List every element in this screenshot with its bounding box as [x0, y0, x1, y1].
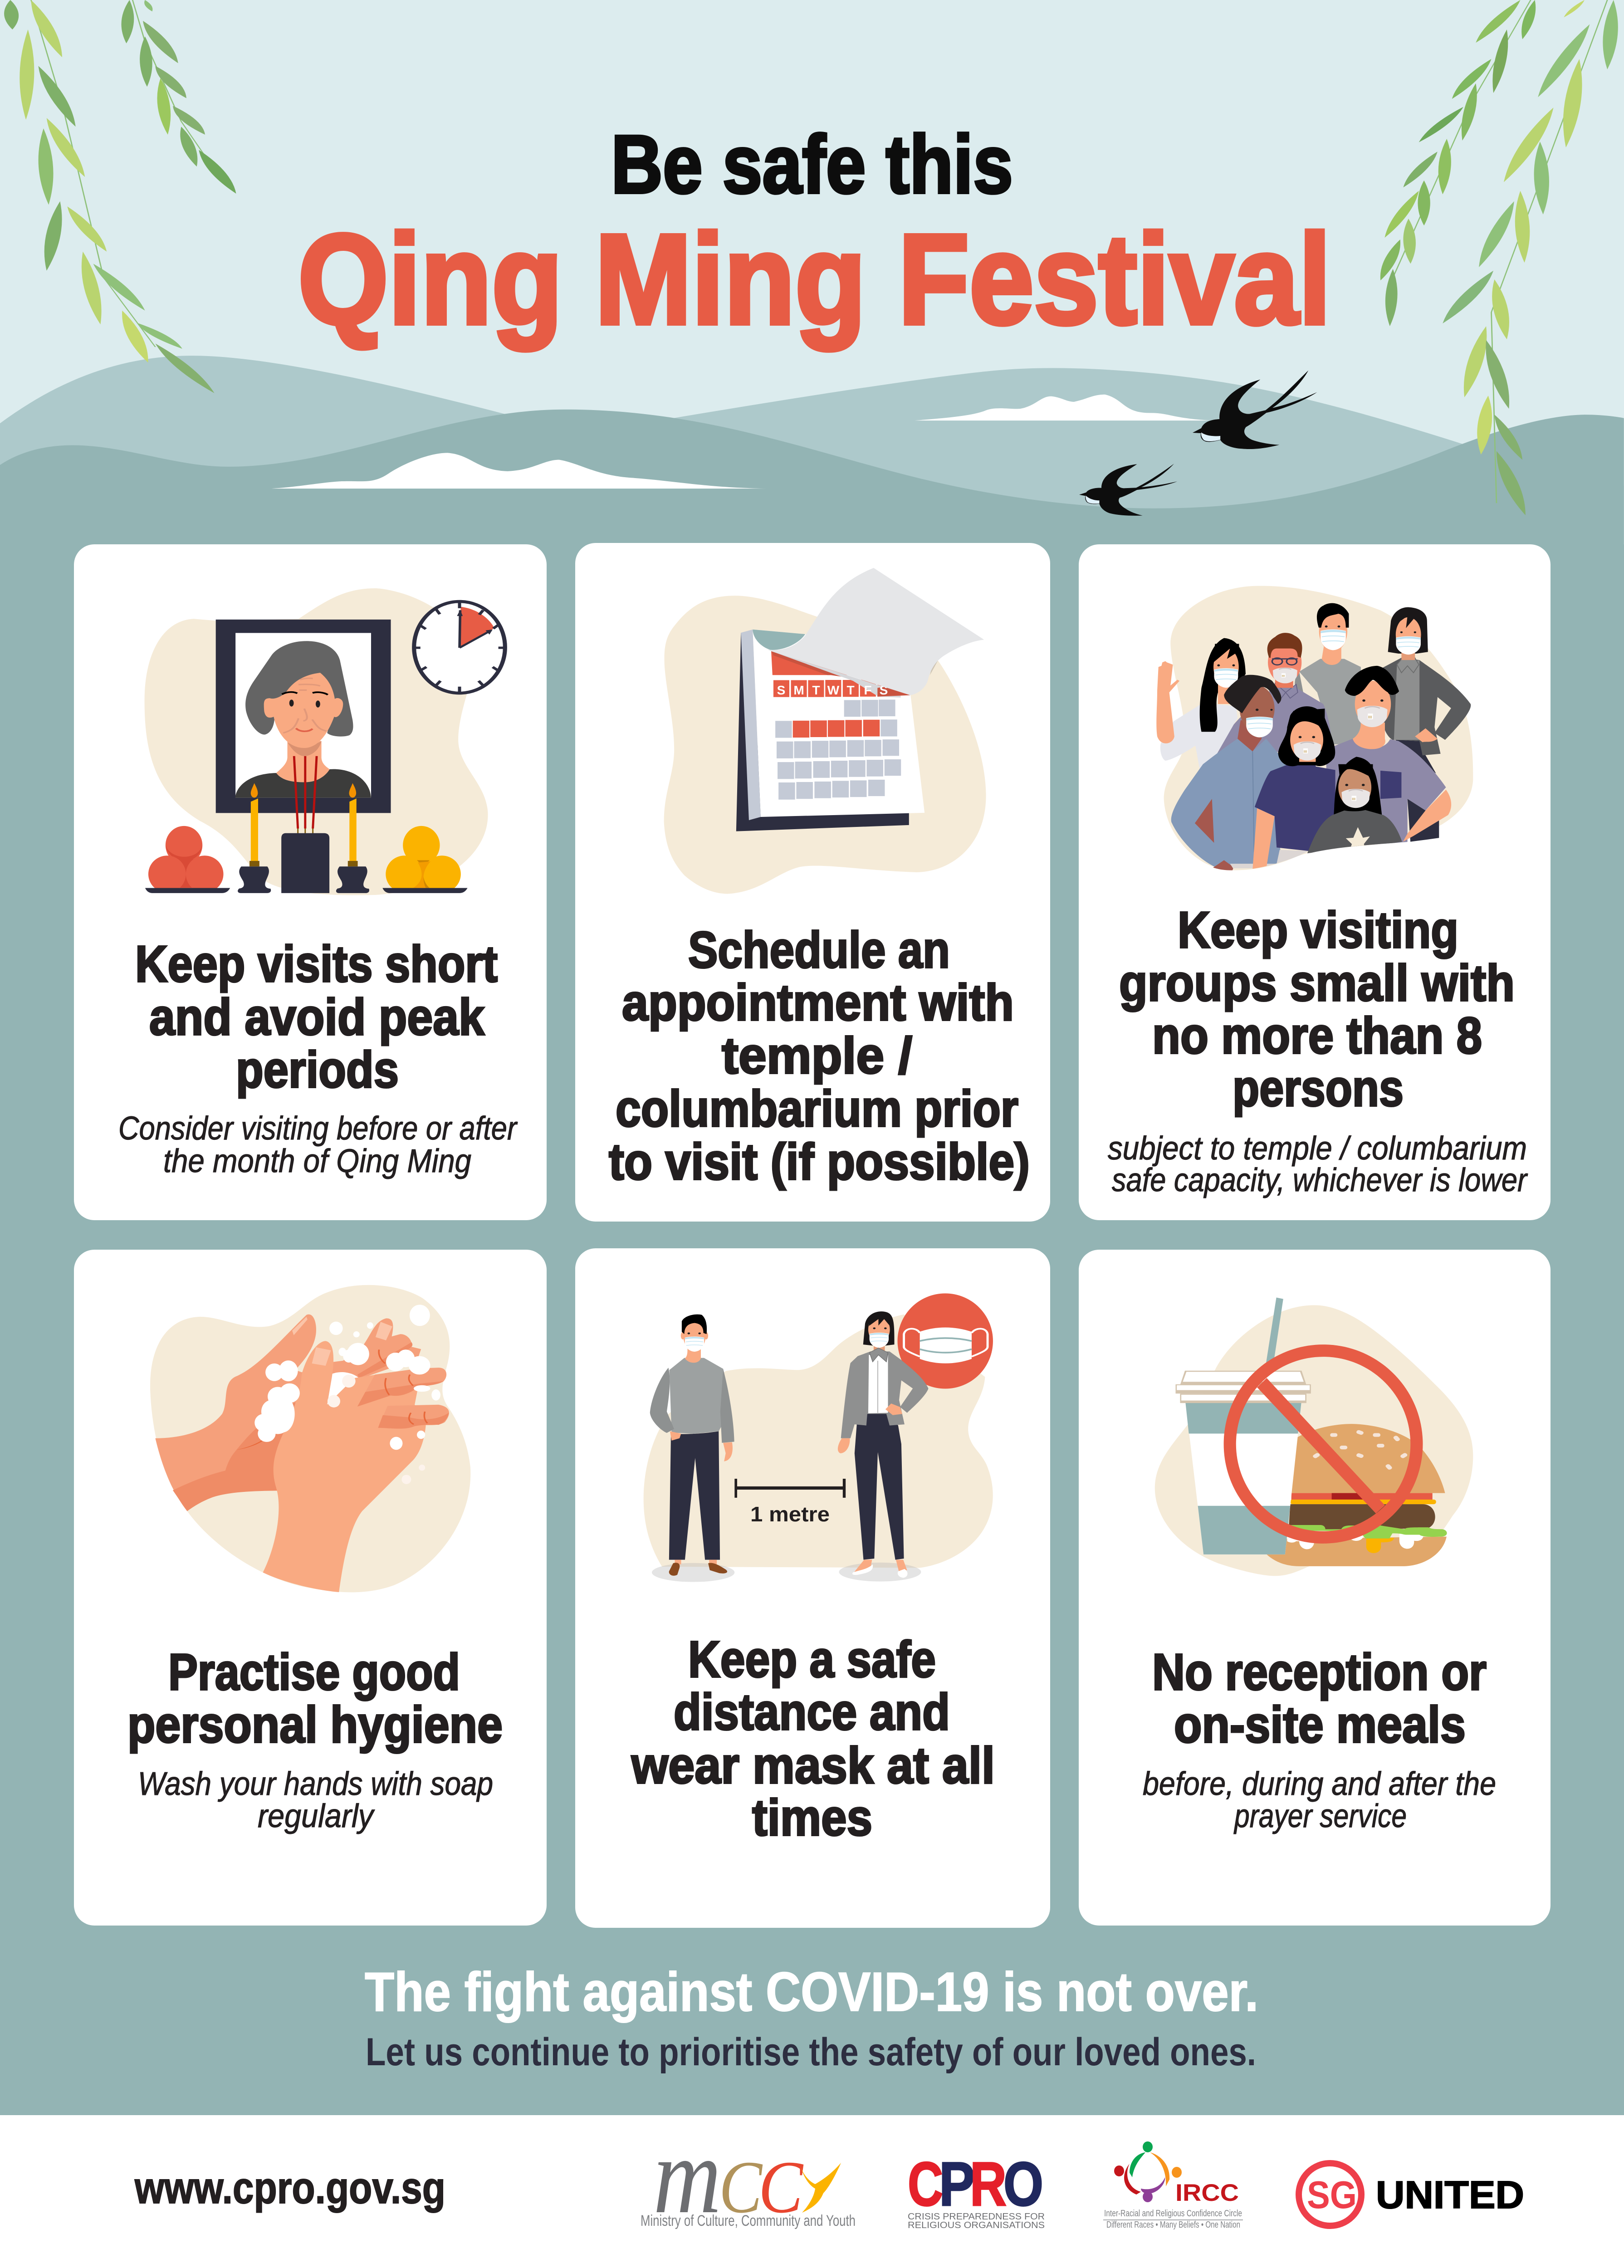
heading	[1119, 901, 1515, 1117]
panel: keep groups small	[1079, 544, 1551, 1220]
subtext: subject to temple / columbarium	[1108, 1130, 1527, 1167]
logo: IRCC	[1103, 2141, 1243, 2230]
heading: wear mask at all	[631, 1737, 995, 1794]
closing message	[365, 1961, 1258, 2074]
logo: IRCC: Inter-Racial and Religious Confidence Circle	[1104, 2209, 1242, 2219]
heading: No reception or	[1152, 1643, 1487, 1701]
subtext: Wash your hands with soap	[138, 1766, 493, 1802]
subtext	[138, 1766, 493, 1834]
heading	[135, 935, 498, 1098]
card background	[74, 1250, 547, 1926]
logo: CPRO: RELIGIOUS ORGANISATIONS	[908, 2220, 1045, 2230]
logo: IRCC: IRCC	[1175, 2180, 1239, 2206]
heading: columbarium prior	[616, 1080, 1018, 1137]
willow leaves left	[4, 0, 236, 393]
logo: CPRO	[908, 2150, 1045, 2230]
title line 1: Be safe this	[611, 118, 1013, 210]
willow leaves right	[1380, 0, 1618, 515]
subtext	[118, 1110, 518, 1179]
subtext: regularly	[258, 1798, 375, 1834]
illustration: calendar	[664, 596, 986, 894]
subtext: Consider visiting before or after	[118, 1110, 518, 1147]
heading: distance and	[674, 1683, 950, 1740]
teal body background	[0, 544, 1624, 2115]
bird small	[1079, 464, 1177, 516]
logo: CPRO: CRISIS PREPAREDNESS FOR	[908, 2212, 1045, 2222]
logo: MCCY: m	[653, 2115, 721, 2236]
calendar weekday letters: T	[846, 683, 855, 697]
heading: groups small with	[1119, 954, 1515, 1012]
subtext: prayer service	[1233, 1798, 1407, 1834]
title line 2: Qing Ming Festival	[298, 208, 1331, 352]
subtext: safe capacity, whichever is lower	[1112, 1162, 1528, 1198]
logo: MCCY: C	[719, 2146, 763, 2229]
heading: Practise good	[168, 1643, 460, 1701]
logo: MCCY: C	[758, 2146, 804, 2229]
subtext: before, during and after the	[1143, 1766, 1496, 1802]
logo: MCCY: Ministry of Culture, Community and Youth	[641, 2212, 856, 2229]
website: www.cpro.gov.sg	[134, 2163, 445, 2213]
subtext	[1108, 1130, 1528, 1198]
logo: CPRO: C	[908, 2150, 943, 2219]
logo: SG United	[1299, 2163, 1524, 2226]
logo: CPRO: R	[970, 2150, 1007, 2219]
heading: Keep visiting	[1178, 901, 1458, 958]
heading: and avoid peak	[149, 988, 484, 1046]
logo: IRCC: Different Races • Many Beliefs • One Nation	[1106, 2220, 1240, 2230]
panel: personal hygiene	[74, 1250, 547, 1926]
bird large	[1193, 371, 1317, 449]
heading: Keep a safe	[688, 1631, 936, 1688]
logo: SG United: UNITED	[1376, 2174, 1524, 2217]
heading	[631, 1631, 995, 1846]
logo: SG United: SG	[1307, 2174, 1357, 2217]
calendar weekday letters: S	[880, 683, 888, 697]
calendar turning page	[767, 568, 984, 695]
heading: no more than 8	[1152, 1007, 1482, 1064]
heading: times	[752, 1789, 872, 1846]
cloud left	[271, 453, 766, 489]
card background	[74, 544, 547, 1220]
calendar weekday letters	[777, 683, 888, 697]
heading	[127, 1643, 503, 1753]
illustration: group of masked people	[1156, 586, 1473, 873]
heading: to visit (if possible)	[609, 1133, 1030, 1190]
heading: temple /	[722, 1027, 912, 1084]
label: 1 metre: 1 metre	[750, 1502, 830, 1526]
background: sky	[0, 0, 1624, 590]
calendar weekday letters: F	[864, 683, 872, 697]
subtext	[1143, 1766, 1496, 1834]
heading: appointment with	[622, 974, 1014, 1031]
illustration: portrait altar and clock	[145, 588, 505, 895]
heading: Schedule an	[688, 921, 950, 978]
illustration: drink and burger prohibited	[1155, 1298, 1473, 1576]
illustration: two people one metre apart	[644, 1293, 993, 1582]
subtext: the month of Qing Ming	[163, 1143, 471, 1179]
illustration: washing hands	[150, 1285, 470, 1592]
card background	[575, 1248, 1050, 1928]
cloud right	[915, 395, 1212, 420]
closing headline: The fight against COVID-19 is not over.	[365, 1961, 1258, 2023]
heading: personal hygiene	[127, 1696, 503, 1753]
logo: CPRO: O	[1003, 2150, 1043, 2219]
heading	[1152, 1643, 1487, 1753]
calendar weekday letters: W	[827, 683, 840, 697]
front hills	[0, 410, 1624, 590]
heading	[609, 921, 1030, 1190]
calendar weekday letters: T	[812, 683, 820, 697]
panel: safe distance and mask	[575, 1248, 1050, 1928]
panel: schedule an appointment	[575, 543, 1050, 1222]
back hills	[0, 356, 1624, 544]
calendar weekday letters: S	[777, 683, 785, 697]
panel: no meals	[1079, 1250, 1551, 1926]
closing subline: Let us continue to prioritise the safety of our loved ones.	[366, 2030, 1256, 2074]
card background	[1079, 544, 1551, 1220]
calendar weekday letters: M	[793, 683, 804, 697]
panel: keep visits short	[74, 544, 547, 1220]
landscape scene: hills, clouds, birds	[0, 356, 1624, 590]
logo: CPRO: P	[939, 2150, 975, 2219]
title	[298, 118, 1331, 352]
heading: persons	[1233, 1060, 1404, 1117]
card background	[575, 543, 1050, 1222]
heading: Keep visits short	[135, 935, 498, 992]
heading: periods	[236, 1041, 399, 1098]
card background	[1079, 1250, 1551, 1926]
logo: MCCY	[641, 2115, 856, 2236]
heading: on-site meals	[1174, 1696, 1466, 1753]
